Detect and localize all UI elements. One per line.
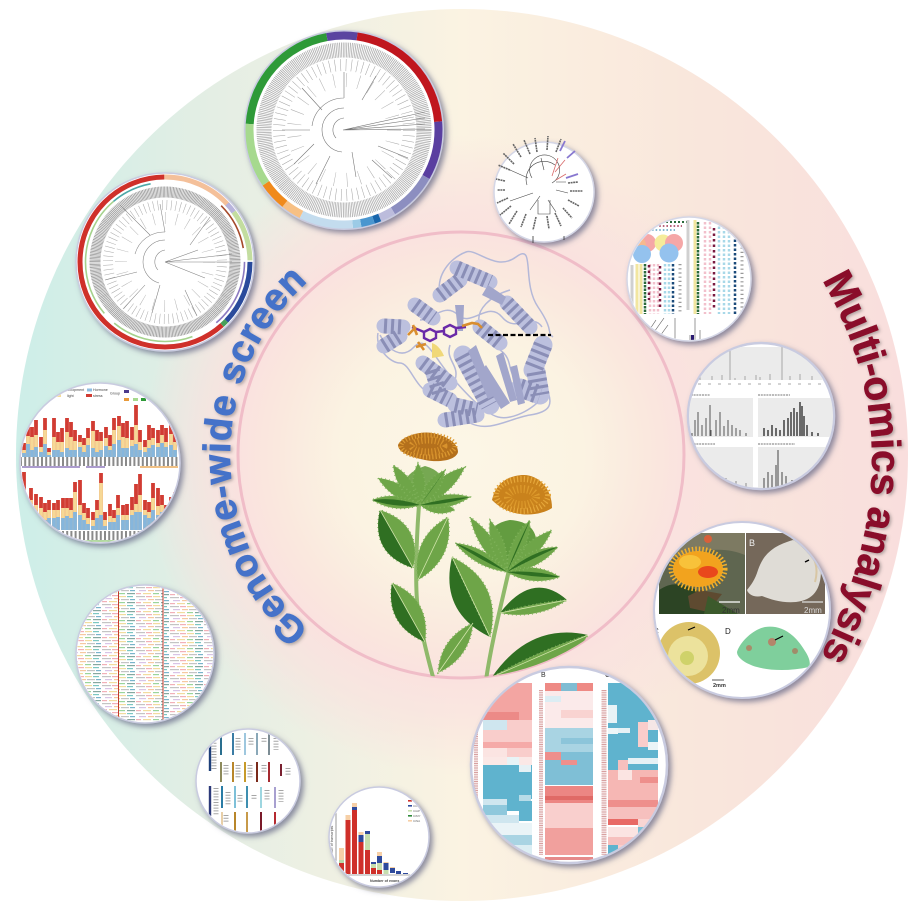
circular chart: second phylogenetic tree (76, 173, 254, 351)
axis labels: Number of transcripts (330, 825, 334, 860)
top spectrum (700, 347, 812, 380)
circular panel: safflower photos (653, 522, 830, 698)
right flower bracts (495, 520, 536, 562)
right middle spectrum (764, 402, 818, 436)
axis labels: Number of exons (370, 879, 399, 883)
left flower bracts (408, 466, 444, 496)
photo B: seed section (746, 533, 825, 615)
legend: stress (93, 394, 103, 398)
circular chart: chromosome gene map (196, 729, 300, 833)
heading: Genome-wide screen: Genome-wide screen (202, 270, 309, 646)
legend: CtNA (413, 819, 420, 823)
outer clade ring (80, 177, 250, 347)
photo B: seed section: B (749, 538, 755, 548)
chromosome bars (210, 733, 281, 832)
heatmap B dendrogram (539, 690, 543, 855)
circular chart: large phylogenetic tree (245, 31, 443, 229)
colored species labels (560, 141, 578, 178)
radial species labels (496, 136, 583, 230)
panel letters: C (605, 672, 610, 679)
center panel: protein and plant (238, 232, 684, 680)
legend: Group (110, 392, 120, 396)
dashed reference line (488, 334, 551, 336)
top group color line (22, 466, 105, 468)
legend: CtMY (413, 814, 420, 818)
aligned motif rows (76, 585, 214, 727)
axis labels (330, 825, 399, 883)
colored clade ring (250, 36, 438, 224)
legend: Development (63, 388, 84, 392)
stacked bars (339, 803, 408, 874)
tree branches (510, 155, 568, 214)
inner annotation ring (86, 182, 244, 342)
top stacked bars (24, 405, 175, 457)
photo B: seed section: 2mm (804, 606, 822, 615)
top dot legend (666, 221, 686, 223)
right orange flower head (492, 475, 552, 515)
spectra panel backgrounds (688, 347, 834, 490)
photo A: flower (659, 533, 745, 615)
bottom left spectrum (695, 450, 746, 488)
venn diagrams (630, 234, 683, 263)
heatmap B colorbar (545, 857, 593, 860)
gene labels ring (264, 50, 424, 210)
gene tick labels (214, 738, 288, 822)
photo C: yellow cross-section: 2mm (713, 683, 726, 689)
legend: CtAP (413, 809, 420, 813)
bottom panel marks (533, 236, 564, 243)
bottom group color line (83, 540, 117, 542)
circular chart: small phylogenetic tree (494, 136, 594, 243)
circular chart: stacked bar by exon number (329, 787, 429, 887)
heatmap A dendrogram (474, 700, 478, 845)
left orange flower head (398, 433, 458, 461)
third dot legend (652, 229, 675, 231)
photo C: yellow cross-section: C (653, 627, 659, 636)
gene labels ring (95, 192, 235, 332)
heatmap C dendrogram (602, 690, 606, 855)
central halo (142, 135, 782, 775)
legend: Hormone (93, 388, 108, 392)
legend: CtGL (413, 804, 420, 808)
tree guides (632, 220, 688, 312)
legend (56, 388, 146, 401)
circular chart: venn and dot matrix (627, 217, 751, 342)
lower panels (648, 318, 700, 341)
heading: Multi-omics analysis: Multi-omics analysis (823, 268, 905, 666)
panel letters: B (541, 672, 546, 679)
second dot legend (659, 225, 682, 227)
protein structure ribbon (378, 252, 553, 426)
top sample labels strip (20, 457, 180, 466)
circular chart: stacked bar plots (20, 383, 180, 543)
tree branches (279, 65, 425, 195)
panel letters (541, 672, 610, 679)
safflower plant illustration (372, 433, 588, 680)
lower bar (691, 335, 694, 340)
tree branches (105, 204, 232, 319)
heatmap C (608, 683, 658, 855)
circular chart: mass spectra (688, 343, 834, 490)
photo A: flower: 2mm (722, 606, 740, 615)
red clade branches (552, 158, 566, 180)
center circle outline (238, 232, 684, 678)
bottom right spectrum (764, 450, 808, 488)
top axis (698, 384, 821, 385)
top group line orange (140, 466, 178, 468)
bottom stacked bars (24, 472, 175, 530)
bottom sample labels strip (62, 531, 140, 540)
legend: light (67, 394, 74, 398)
photo C: yellow cross-section (653, 622, 726, 689)
left middle spectrum (692, 405, 746, 436)
axes (336, 810, 412, 875)
separator lines (118, 585, 163, 725)
dot matrix columns (637, 220, 742, 314)
panel captions (688, 395, 795, 444)
circular chart: sequence motif alignment (76, 585, 214, 727)
heatmap A (483, 683, 532, 860)
photo D: green cross-section (725, 627, 810, 670)
photo D: green cross-section: D (725, 627, 731, 636)
heatmap B (545, 683, 593, 855)
legend: CtHD (413, 799, 421, 803)
circular chart: expression heatmaps (471, 667, 667, 863)
legend (408, 800, 420, 822)
